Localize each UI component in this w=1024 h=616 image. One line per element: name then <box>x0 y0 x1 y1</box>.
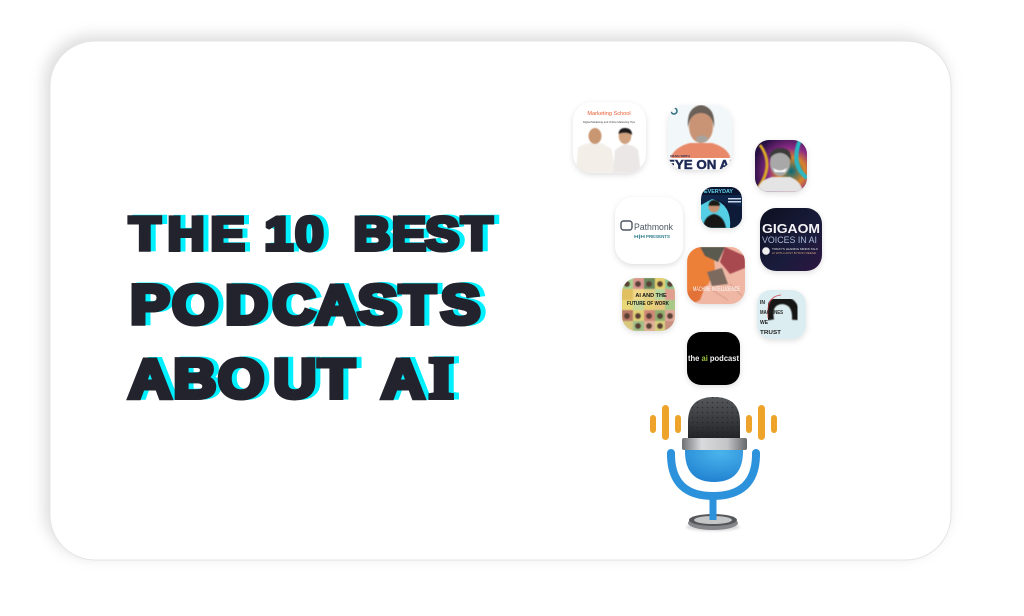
title text: dark layer <box>129 208 493 411</box>
title text: dark layer: I <box>429 347 453 411</box>
podcast cover: Marketing School: Digital Marketing and Online Marketing Tips <box>583 120 636 124</box>
title shadow: cyan offset layer: 10 <box>269 208 329 260</box>
podcast cover: the ai podcast <box>687 332 740 387</box>
podcast cover: Gigaom Voices in AI <box>760 208 822 273</box>
podcast cover: Machine Intelligence <box>687 247 745 306</box>
podcast cover: Marketing School <box>573 102 646 175</box>
title text: dark layer: THE <box>129 208 245 260</box>
title text: dark layer: 10 <box>264 208 324 260</box>
icon: studio microphone <box>650 397 777 531</box>
title text: dark layer: ABOUT <box>129 348 355 410</box>
podcast cover: Gigaom Voices in AI: TODAY'S LEADING MINDS TALK <box>772 247 818 251</box>
podcast cover: Gigaom Voices in AI: GIGAOM <box>762 221 820 236</box>
podcast cover: Eye on AI: CRAIG SMITH <box>670 154 690 158</box>
icon: microphone base <box>686 514 740 531</box>
podcast cover: In Machines We Trust: WE <box>760 320 769 326</box>
title shadow: cyan offset layer: THE <box>134 208 250 260</box>
podcast cover: In Machines We Trust: MACHINES <box>760 310 784 316</box>
title shadow: cyan offset layer: PODCASTS <box>135 274 485 335</box>
podcast cover: Eye on AI <box>666 105 733 172</box>
podcast cover: AI and the Future of Work: AI AND THE <box>635 293 667 299</box>
title shadow: cyan offset layer <box>134 208 498 410</box>
podcast cover: AI and the Future of Work: FUTURE OF WORK <box>627 301 669 307</box>
title text: dark layer: PODCASTS <box>130 274 480 336</box>
podcast cover: Pathmonk: Pathmonk <box>634 222 673 232</box>
podcast cover: Eye on AI: EYE ON AI <box>666 157 733 172</box>
podcast cover: Pathmonk: H|H <box>634 234 645 239</box>
panel: white rounded card <box>44 35 951 560</box>
title shadow: cyan offset layer: ABOUT <box>134 348 360 409</box>
title shadow: cyan offset layer: A <box>386 348 429 409</box>
podcast cover: Everyday AI: EVERYDAY <box>704 189 733 195</box>
podcast cover: Pathmonk <box>615 197 683 266</box>
podcast cover: Gigaom Voices in AI: AI WITH HOST BYRON REESE <box>772 251 816 255</box>
podcast cover: AI and the Future of Work <box>622 278 675 333</box>
podcast cover: Pathmonk: PRESENTS <box>646 234 670 239</box>
podcast cover: In Machines We Trust: TRUST <box>760 330 781 336</box>
title text: dark layer: BEST <box>353 208 493 260</box>
podcast cover: Everyday AI <box>701 187 742 230</box>
podcast cover: portrait on swirl <box>755 140 807 194</box>
podcast cover: the ai podcast: the ai podcast <box>688 353 739 363</box>
title shadow: cyan offset layer: BEST <box>358 208 498 260</box>
title text: dark layer: A <box>381 348 424 410</box>
icon: left sound bars <box>650 405 681 440</box>
podcast cover: In Machines We Trust <box>757 290 806 341</box>
icon: microphone stand <box>671 453 756 520</box>
podcast cover: Machine Intelligence: MACHINE INTELLIGENCE <box>693 286 740 293</box>
icon: right sound bars <box>746 405 777 440</box>
podcast cover: Marketing School: Marketing School <box>587 111 631 117</box>
podcast cover: In Machines We Trust: IN <box>760 300 765 306</box>
icon: microphone capsule <box>682 397 747 482</box>
title shadow: cyan offset layer: I <box>434 346 458 410</box>
podcast cover: Gigaom Voices in AI: VOICES IN AI <box>762 235 817 246</box>
title <box>129 208 498 411</box>
